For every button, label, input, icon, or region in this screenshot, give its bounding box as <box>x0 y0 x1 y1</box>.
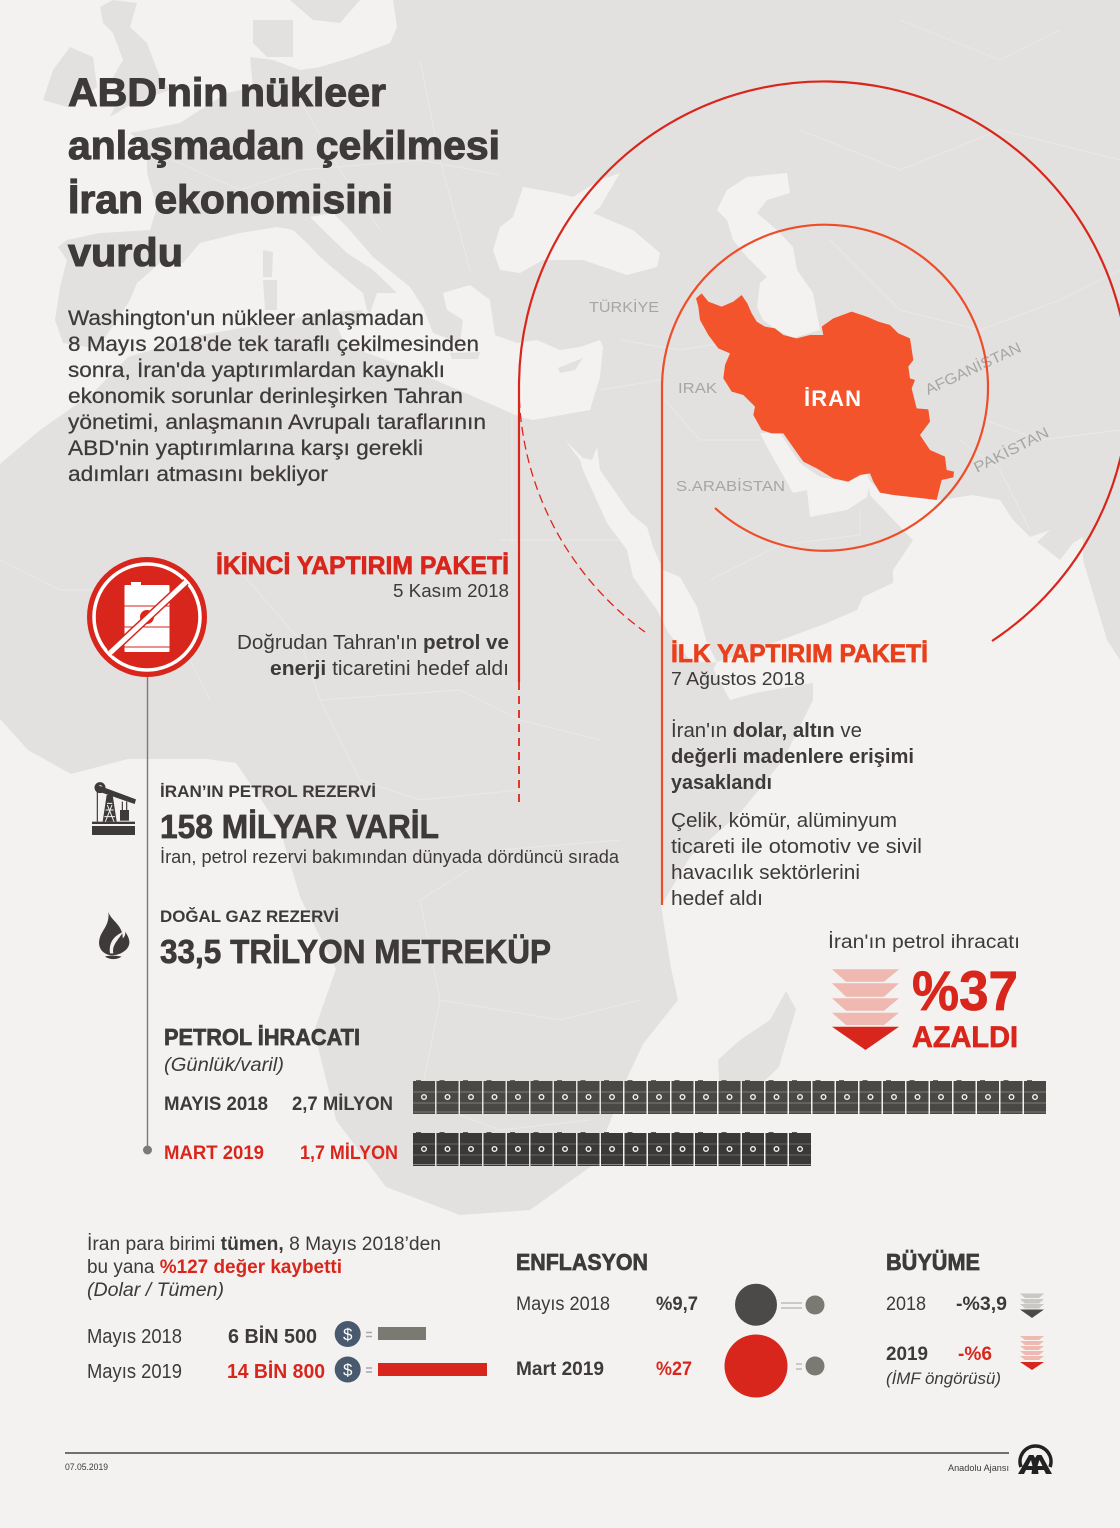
map labels: IRAK <box>678 380 717 397</box>
footer <box>65 1446 1052 1474</box>
barrel row: May 2018, 27 barrels <box>413 1080 1046 1114</box>
rate: May 2018: Mayıs 2018 <box>87 1326 182 1348</box>
icon: crossed-out oil barrel <box>87 557 207 677</box>
icon: oil pumpjack <box>92 784 136 835</box>
map labels: S.ARABİSTAN <box>676 477 785 495</box>
outer red arc: second sanctions package <box>519 81 1120 805</box>
oil reserve <box>160 782 620 867</box>
inflation May 2018: %9,7 <box>656 1294 698 1315</box>
natural gas reserve: DOĞAL GAZ REZERVİ <box>160 907 339 926</box>
map labels: TÜRKİYE <box>589 298 659 316</box>
natural gas reserve: 33,5 TRİLYON METREKÜP <box>160 933 551 970</box>
currency description <box>87 1234 441 1301</box>
inflation May 2018 <box>516 1284 824 1326</box>
inflation May 2018: Mayıs 2018 <box>516 1294 610 1315</box>
second sanctions package text: enerji ticaretini hedef aldı <box>270 658 509 680</box>
first sanctions package text: yasaklandı <box>671 772 772 794</box>
first sanctions package text <box>671 640 928 910</box>
oil reserve: 158 MİLYAR VARİL <box>160 808 439 845</box>
export row labels: May 2018: MAYIS 2018 <box>164 1094 268 1115</box>
map labels: PAKİSTAN <box>971 423 1052 477</box>
second sanctions package text: İKİNCİ YAPTIRIM PAKETİ <box>216 552 509 580</box>
export row labels: March 2019: 1,7 MİLYON <box>300 1143 398 1164</box>
first sanctions package text: hedef aldı <box>671 888 763 910</box>
inflation March 2019 <box>516 1334 824 1398</box>
export row labels: March 2019: MART 2019 <box>164 1143 264 1164</box>
growth 2018: 2018 <box>886 1294 926 1315</box>
title: ABD'nin nükleer <box>68 71 386 115</box>
intro paragraph: sonra, İran'da yaptırımlardan kaynaklı <box>68 359 445 382</box>
oil reserve: İran, petrol rezervi bakımından dünyada dördüncü sırada <box>160 847 620 867</box>
rate: May 2019: 14 BİN 800 <box>227 1360 325 1383</box>
barrel row: March 2019, 17 barrels <box>413 1132 811 1166</box>
map labels: AFGANİSTAN <box>922 338 1024 399</box>
rate: May 2018 <box>87 1321 426 1348</box>
growth heading: BÜYÜME <box>886 1249 980 1275</box>
callout: oil exports down 37 percent: %37 <box>912 959 1018 1022</box>
intro paragraph <box>68 307 486 486</box>
natural gas reserve <box>160 907 551 970</box>
agency name: Anadolu Ajansı <box>948 1463 1009 1474</box>
oil exports heading: (Günlük/varil) <box>164 1055 284 1076</box>
panel: inflation <box>516 1249 824 1398</box>
rate: May 2019: $ <box>343 1360 353 1380</box>
growth 2018: -%3,9 <box>956 1294 1007 1315</box>
inflation March 2019: Mart 2019 <box>516 1359 604 1380</box>
title <box>68 71 500 275</box>
map: Europe, Africa and Asia landmass <box>0 0 1120 1215</box>
oil exports heading <box>164 1024 360 1076</box>
intro paragraph: yönetimi, anlaşmanın Avrupalı taraflarının <box>68 411 486 434</box>
rate: May 2018: $ <box>343 1325 353 1344</box>
oil exports heading: PETROL İHRACATI <box>164 1024 360 1050</box>
rate: May 2019: Mayıs 2019 <box>87 1361 182 1383</box>
first sanctions package text: ticareti ile otomotiv ve sivil <box>671 836 922 858</box>
intro paragraph: ABD'nin yaptırımlarına karşı gerekli <box>68 437 423 460</box>
export row labels: May 2018: 2,7 MİLYON <box>292 1094 393 1115</box>
first sanctions package text: Çelik, kömür, alüminyum <box>671 810 897 832</box>
date: 07.05.2019 <box>65 1462 108 1473</box>
intro paragraph: ekonomik sorunlar derinleşirken Tahran <box>68 385 463 408</box>
second sanctions package text: 5 Kasım 2018 <box>393 580 509 601</box>
callout: oil exports down 37 percent: İran'ın petrol ihracatı <box>828 932 1020 953</box>
timeline line and end dot <box>143 677 152 1154</box>
panel: currency <box>87 1234 487 1383</box>
map labels <box>589 298 1052 495</box>
callout: oil exports down 37 percent: AZALDI <box>912 1021 1018 1054</box>
currency description: İran para birimi tümen, 8 Mayıs 2018’den <box>87 1234 441 1255</box>
currency description: bu yana %127 değer kaybetti <box>87 1257 342 1278</box>
title: İran ekonomisini <box>68 178 393 222</box>
inner orange arc: first sanctions package <box>662 225 988 905</box>
intro paragraph: adımları atmasını bekliyor <box>68 463 328 486</box>
intro paragraph: Washington'un nükleer anlaşmadan <box>68 307 424 330</box>
export row labels: March 2019 <box>164 1143 398 1164</box>
growth 2019: (İMF öngörüsü) <box>886 1369 1001 1388</box>
currency description: (Dolar / Tümen) <box>87 1280 224 1301</box>
export row labels: May 2018 <box>164 1094 393 1115</box>
rate: May 2018: 6 BİN 500 <box>228 1325 317 1348</box>
first sanctions package text: 7 Ağustos 2018 <box>671 668 805 689</box>
oil reserve: İRAN’IN PETROL REZERVİ <box>160 782 376 801</box>
Iran highlighted on the map: İRAN <box>804 386 861 411</box>
title: anlaşmadan çekilmesi <box>68 124 500 168</box>
growth 2019 <box>886 1336 1044 1388</box>
inflation March 2019: %27 <box>656 1359 692 1380</box>
growth 2019: -%6 <box>958 1344 992 1365</box>
intro paragraph: 8 Mayıs 2018'de tek taraflı çekilmesinden <box>68 333 479 356</box>
icon: gas flame <box>99 912 129 959</box>
Iran highlighted on the map <box>696 293 954 500</box>
second sanctions package text: Doğrudan Tahran'ın petrol ve <box>237 632 509 654</box>
callout: oil exports down 37 percent <box>828 932 1020 1054</box>
first sanctions package text: İran'ın dolar, altın ve <box>671 719 862 742</box>
title: vurdu <box>68 231 183 275</box>
first sanctions package text: havacılık sektörlerini <box>671 862 860 884</box>
logo: Anadolu Agency <box>1018 1446 1052 1474</box>
panel: growth <box>886 1249 1044 1388</box>
first sanctions package text: değerli madenlere erişimi <box>671 746 914 768</box>
second sanctions package text <box>216 552 509 680</box>
growth 2019: 2019 <box>886 1344 928 1365</box>
growth 2018 <box>886 1294 1044 1318</box>
rate: May 2019 <box>87 1356 487 1383</box>
first sanctions package text: İLK YAPTIRIM PAKETİ <box>671 640 928 668</box>
inflation heading: ENFLASYON <box>516 1249 648 1275</box>
